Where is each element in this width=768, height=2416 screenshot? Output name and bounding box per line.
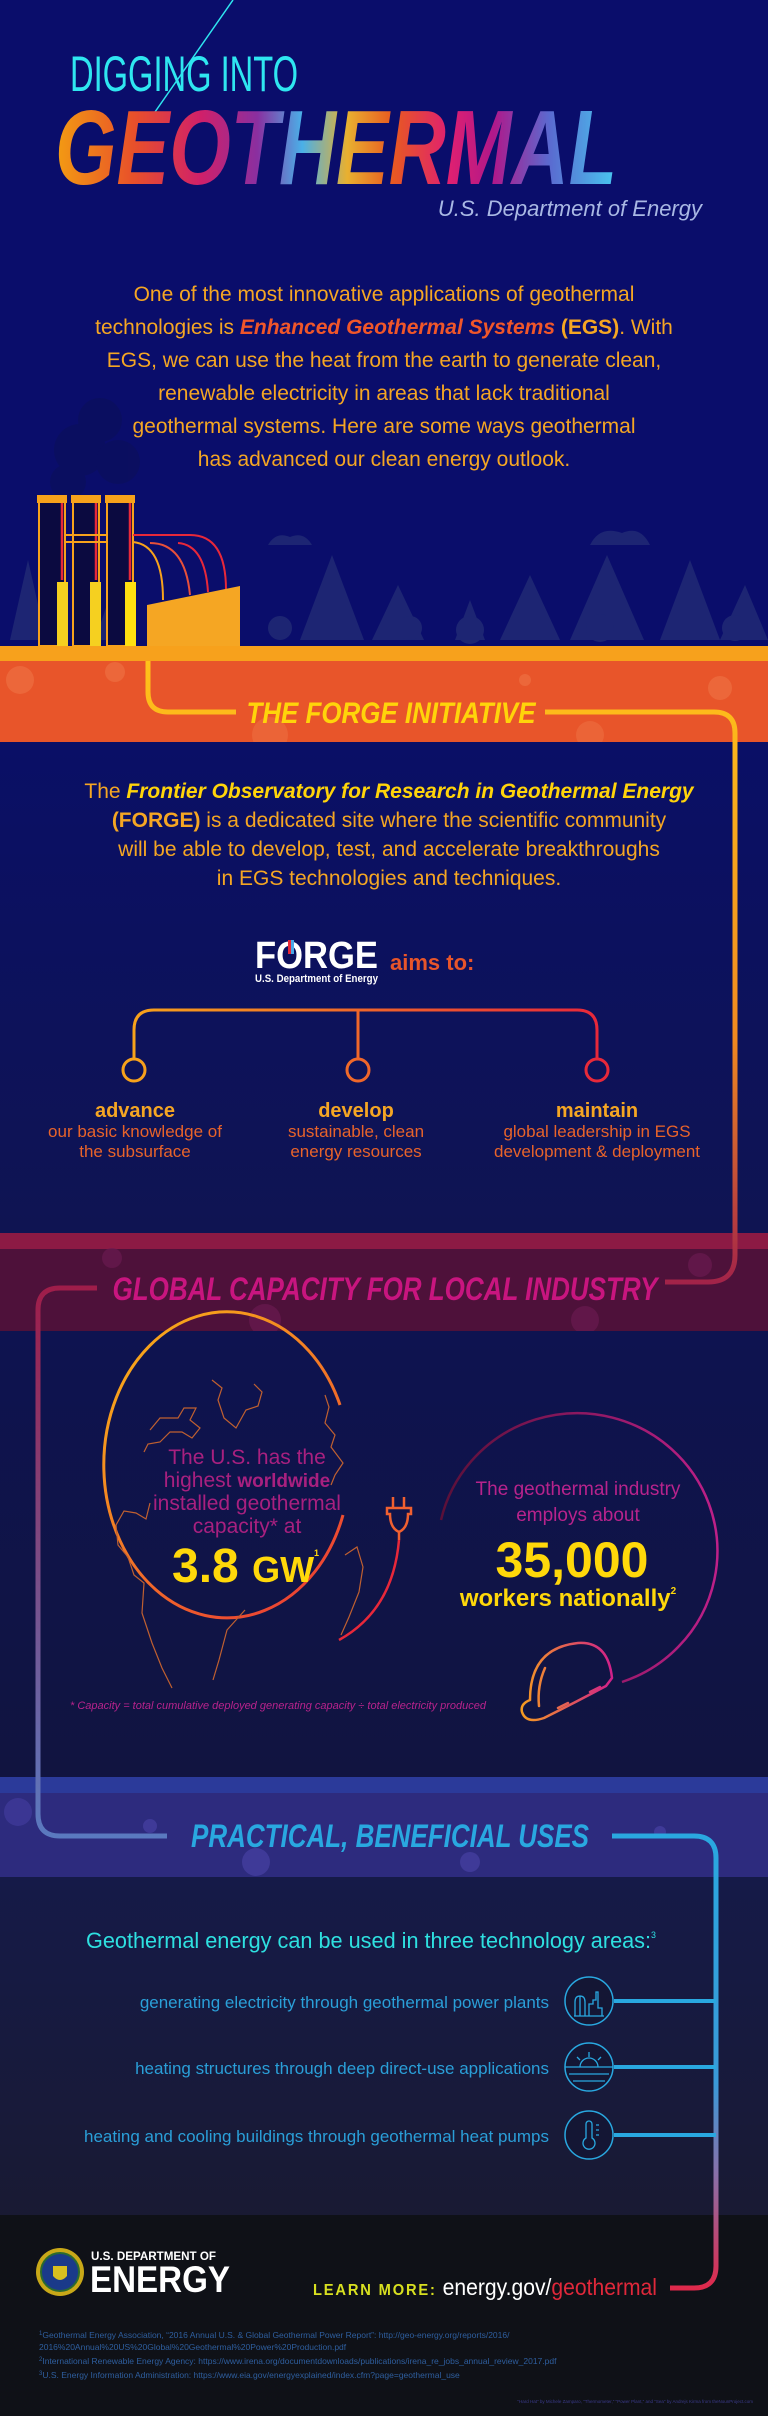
pipe: blue right line <box>612 1836 716 2288</box>
globe text <box>153 1446 341 1538</box>
icon: plug <box>339 1497 411 1640</box>
use item: power plants: generating electricity through geothermal power plants <box>140 1993 549 2012</box>
illustration: power plant <box>37 495 240 646</box>
use item: heat pumps <box>84 2111 716 2159</box>
forge paragraph <box>84 780 695 890</box>
footer: DOE logo: ENERGY <box>90 2259 230 2300</box>
use item: power plants <box>140 1977 716 2025</box>
credit: "Hard Hat" by Michele Zamparo, "Thermometer," "Power Plant," and "Sea" by Andrejs Kirma from theNounProject.com <box>517 2399 753 2404</box>
subtitle: department: U.S. Department of Energy <box>438 196 704 221</box>
aim: develop: sustainable, clean <box>288 1122 424 1141</box>
forge paragraph: The Frontier Observatory for Research in Geothermal Energy <box>84 780 695 803</box>
footer: DOE logo <box>36 2248 230 2300</box>
forge paragraph: in EGS technologies and techniques. <box>217 867 561 890</box>
pipe: yellow forge line <box>148 661 735 1282</box>
footnotes: International Renewable Energy Agency: https://www.irena.org/documentdownloads/publications/irena_re_jobs_annual_review_2017.pdf <box>42 2356 557 2366</box>
footnotes: 2016%20Annual%20US%20Global%20Geothermal%20Power%20Production.pdf <box>39 2342 347 2352</box>
aim: maintain <box>494 1100 700 1161</box>
globe <box>104 1312 363 1688</box>
aim: maintain: development & deployment <box>494 1142 700 1161</box>
forge paragraph: will be able to develop, test, and accelerate breakthroughs <box>117 838 660 861</box>
illustration: smoke <box>50 398 140 500</box>
globe text: capacity* at <box>193 1515 301 1538</box>
aim: develop: develop <box>318 1100 394 1122</box>
aim: maintain: global leadership in EGS <box>503 1122 691 1141</box>
background: uses section <box>0 1877 768 2215</box>
intro paragraph: technologies is Enhanced Geothermal Systems (EGS). With <box>95 316 673 339</box>
footnotes: 1 <box>39 2331 43 2337</box>
globe text: The U.S. has the <box>168 1446 326 1469</box>
icon: hard hat <box>522 1643 612 1720</box>
footnotes: U.S. Energy Information Administration: https://www.eia.gov/energyexplained/index.cfm?page=geothermal_use <box>42 2370 460 2380</box>
background: global section <box>0 1331 768 1777</box>
heading: practical uses: PRACTICAL, BENEFICIAL USES <box>191 1818 590 1854</box>
footnotes: 3 <box>39 2371 43 2377</box>
uses intro: 3 <box>651 1930 656 1940</box>
workers text: 2 <box>671 1586 677 1597</box>
intro paragraph: renewable electricity in areas that lack traditional <box>158 382 610 405</box>
intro paragraph <box>95 283 673 471</box>
heading: global capacity: GLOBAL CAPACITY FOR LOCAL INDUSTRY <box>112 1271 660 1307</box>
forge logo: FORGE <box>255 935 378 977</box>
aim: advance <box>48 1100 222 1161</box>
aim: advance: our basic knowledge of <box>48 1122 222 1141</box>
use item: direct use <box>135 2043 716 2091</box>
intro paragraph: One of the most innovative applications of geothermal <box>134 283 634 306</box>
footnotes: Geothermal Energy Association, “2016 Annual U.S. & Global Geothermal Power Report”: http://geo-energy.org/reports/2016/ <box>42 2330 510 2340</box>
workers text: 35,000 <box>496 1532 648 1588</box>
footnotes <box>39 2330 557 2380</box>
workers text: employs about <box>516 1505 641 1526</box>
background: maroon band <box>0 1233 768 1336</box>
aims to: aims to: <box>390 950 474 975</box>
intro paragraph: geothermal systems. Here are some ways geothermal <box>132 415 636 438</box>
learn more: LEARN MORE: energy.gov/geothermal <box>313 2274 657 2300</box>
heading: forge initiative: THE FORGE INITIATIVE <box>246 697 536 730</box>
aim: maintain: maintain <box>556 1100 638 1122</box>
forge logo: U.S. Department of Energy <box>255 973 379 985</box>
pipe: maroon left line <box>38 1288 167 1836</box>
background: footer <box>0 2215 768 2416</box>
use item: direct use: heating structures through deep direct-use applications <box>135 2059 549 2078</box>
background: top navy <box>0 0 768 646</box>
footnotes: 2 <box>39 2357 43 2363</box>
workers text: The geothermal industry <box>476 1479 681 1500</box>
intro paragraph: has advanced our clean energy outlook. <box>198 448 570 471</box>
arc around workers <box>441 1413 717 1682</box>
uses intro: Geothermal energy can be used in three technology areas: <box>86 1928 660 1953</box>
use item: heat pumps: heating and cooling buildings through geothermal heat pumps <box>84 2127 549 2146</box>
bracket connector <box>123 1010 608 1081</box>
slash line <box>148 0 233 122</box>
background: FORGE section <box>0 742 768 1233</box>
intro paragraph: EGS, we can use the heat from the earth to generate clean, <box>107 349 661 372</box>
aim: advance: advance <box>95 1100 175 1122</box>
forge paragraph: (FORGE) is a dedicated site where the scientific community <box>112 809 667 832</box>
title: digging into: DIGGING INTO <box>70 46 298 102</box>
globe text: installed geothermal <box>153 1492 341 1515</box>
aim: advance: the subsurface <box>79 1142 191 1161</box>
workers text <box>459 1479 681 1612</box>
workers text: workers nationally <box>460 1585 671 1612</box>
aim: develop: energy resources <box>290 1142 422 1161</box>
background: purple band <box>0 1777 768 1877</box>
aim: develop <box>288 1100 424 1161</box>
capacity footnote: * Capacity = total cumulative deployed generating capacity ÷ total electricity produced <box>70 1700 487 1712</box>
stat: 3.8 GW: 3.8 GW <box>172 1540 314 1593</box>
stat: 3.8 GW: 1 <box>314 1548 319 1558</box>
background: orange ground band <box>0 646 768 753</box>
globe text: highest worldwide <box>164 1469 330 1492</box>
illustration: trees and clouds <box>10 531 768 644</box>
footer: DOE logo: U.S. DEPARTMENT OF <box>91 2249 216 2263</box>
